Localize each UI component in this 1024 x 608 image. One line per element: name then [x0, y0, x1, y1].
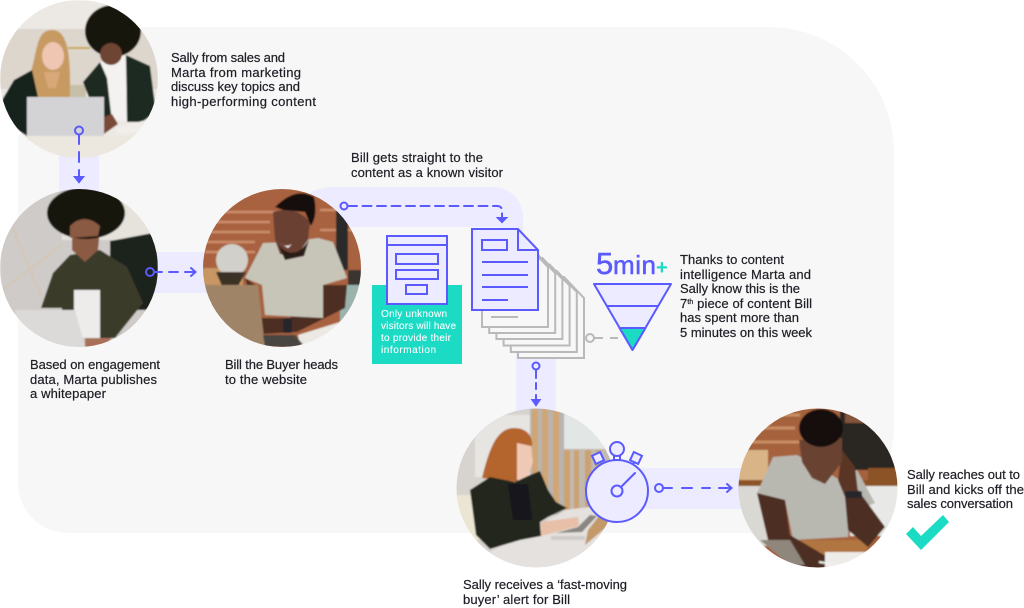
text: step 3: Bill the Buyer heads [225, 357, 338, 372]
callout: unknown visitors: to provide their [381, 333, 452, 344]
text: outreach: Bill and kicks off the [907, 482, 1024, 497]
text: step 1 [171, 50, 316, 109]
text: step 2: data, Marta publishes [30, 372, 158, 387]
text: alert: buyer’ alert for Bill [463, 592, 570, 607]
photo: Marta publishing [0, 187, 158, 350]
text: step 2: Based on engagement [30, 357, 160, 372]
text: step 2 [30, 357, 160, 401]
arrow: website to content [340, 202, 506, 222]
text: step 1: discuss key topics and [171, 79, 300, 94]
text: step 1: Sally from sales and [171, 50, 285, 65]
background panel [18, 27, 894, 533]
text: alert: Sally receives a ‘fast-moving [463, 577, 627, 592]
text: content intelligence: piece of content Bill [693, 296, 812, 311]
icon: front document [472, 229, 538, 310]
text: step 2: a whitepaper [30, 386, 107, 401]
text: step 3 [225, 357, 338, 387]
photo: Sally phoning Bill [735, 405, 900, 570]
photo: Sally receiving the alert [456, 408, 610, 568]
callout: unknown visitors: visitors will have [381, 321, 456, 332]
callout: unknown visitors: Only unknown [381, 309, 447, 320]
text: content intelligence: has spent more than [680, 310, 799, 325]
text: step 1: Marta from marketing [171, 65, 301, 80]
callout: unknown visitors: information [381, 345, 436, 356]
connector band: alert to outreach [640, 468, 745, 509]
label: 5min+: 5 [596, 246, 613, 281]
connector: documents to funnel [586, 334, 618, 342]
photo: Bill at the website [200, 188, 365, 348]
text: content intelligence: th [687, 299, 693, 306]
text: outreach: Sally reaches out to [907, 467, 1020, 482]
label: 5min+ [596, 246, 668, 281]
text: content intelligence: Sally know this is the [680, 281, 800, 296]
text: known visitor: Bill gets straight to the [351, 150, 483, 165]
label: 5min+: min [613, 250, 656, 280]
text: content intelligence: Thanks to content [680, 252, 784, 267]
text: known visitor: content as a known visitor [351, 165, 504, 180]
document stack [482, 246, 584, 358]
text: content intelligence [680, 252, 812, 340]
text: content intelligence: 5 minutes on this week [680, 325, 812, 340]
text: step 3: to the website [225, 372, 307, 387]
connector band: step 1 to 2 [59, 145, 99, 195]
icon: funnel [594, 284, 671, 350]
arrow: step 1 to 2 [75, 126, 83, 182]
arrow: content to alert [532, 362, 540, 405]
icon: form [387, 236, 447, 304]
text: outreach [907, 467, 1024, 511]
text: outreach: sales conversation [907, 496, 1013, 511]
text: step 1: high-performing content [171, 94, 316, 109]
connector band: content to alert [516, 350, 556, 415]
label: 5min+: + [656, 257, 668, 279]
arrow: alert to outreach [655, 484, 732, 492]
arrow: step 2 to 3 [146, 268, 196, 276]
icon: check mark [906, 515, 949, 550]
connector band: website to content [300, 187, 523, 240]
callout: unknown visitors [372, 285, 462, 364]
text: known visitor [351, 150, 504, 180]
text: alert [463, 577, 627, 607]
text: content intelligence: intelligence Marta and [680, 267, 811, 282]
connector band: step 2 to 3 [150, 252, 210, 293]
icon: stopwatch [586, 442, 648, 522]
text: content intelligence: 7 [680, 296, 687, 311]
photo: Sally and Marta at laptop [0, 0, 158, 158]
